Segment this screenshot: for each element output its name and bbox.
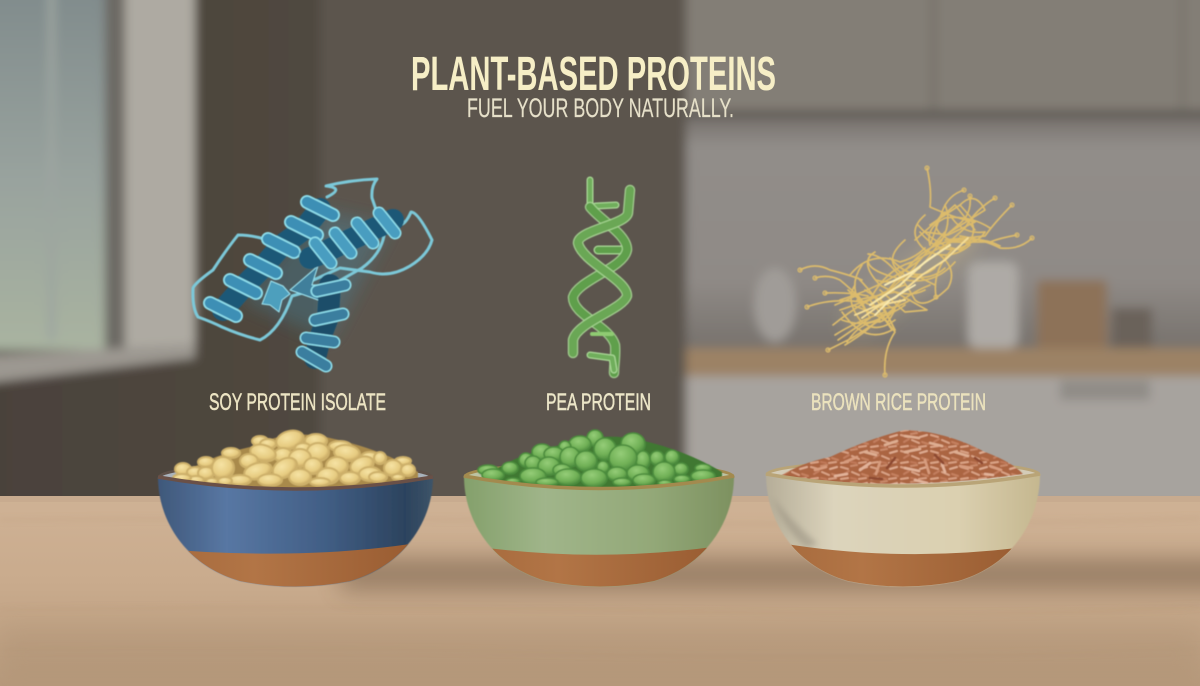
- bowl front rim: [158, 477, 433, 489]
- icon: beta-sheet star and triangle: [262, 281, 290, 312]
- ribbon loops: [193, 179, 432, 340]
- bowl mouth and back rim: [465, 464, 733, 490]
- bowl body: [766, 474, 1040, 586]
- icon: brown rice protein golden tangled strands: [798, 166, 1034, 377]
- label: brown rice protein: BROWN RICE PROTEIN: [811, 389, 986, 416]
- green peas: [478, 430, 722, 488]
- icon: soy protein blue helix model: [193, 179, 432, 366]
- bowl mouth and back rim: [767, 462, 1039, 488]
- helix B: [310, 213, 395, 263]
- subtitle: FUEL YOUR BODY NATURALLY.: [467, 93, 734, 123]
- bowl mouth and back rim: [160, 464, 432, 490]
- soy bowl with soybeans: [158, 428, 433, 586]
- terracotta base: [791, 544, 1012, 586]
- pea bowl with green peas: [464, 430, 734, 586]
- bowl front rim: [766, 474, 1040, 486]
- rice bowl with brown rice: [766, 430, 1040, 586]
- icon: pea protein green double helix: [573, 180, 630, 373]
- terracotta base: [492, 548, 707, 586]
- title: PLANT-BASED PROTEINS: [411, 48, 776, 101]
- label: pea protein: PEA PROTEIN: [546, 389, 651, 416]
- brown rice mound: [779, 430, 1023, 484]
- terracotta base: [188, 544, 408, 586]
- shaded bowl flank: [772, 497, 818, 548]
- bowl front rim: [464, 476, 734, 488]
- wooden table top: [0, 496, 1200, 686]
- strand end beads: [798, 166, 1034, 377]
- label: soy protein isolate: SOY PROTEIN ISOLATE: [209, 389, 386, 416]
- helix A: [210, 202, 333, 316]
- helix C: [302, 285, 345, 366]
- soybeans: [172, 428, 418, 488]
- bowl shadows on the table: [340, 558, 1200, 590]
- bowl body: [158, 477, 433, 586]
- bowl body: [464, 476, 734, 586]
